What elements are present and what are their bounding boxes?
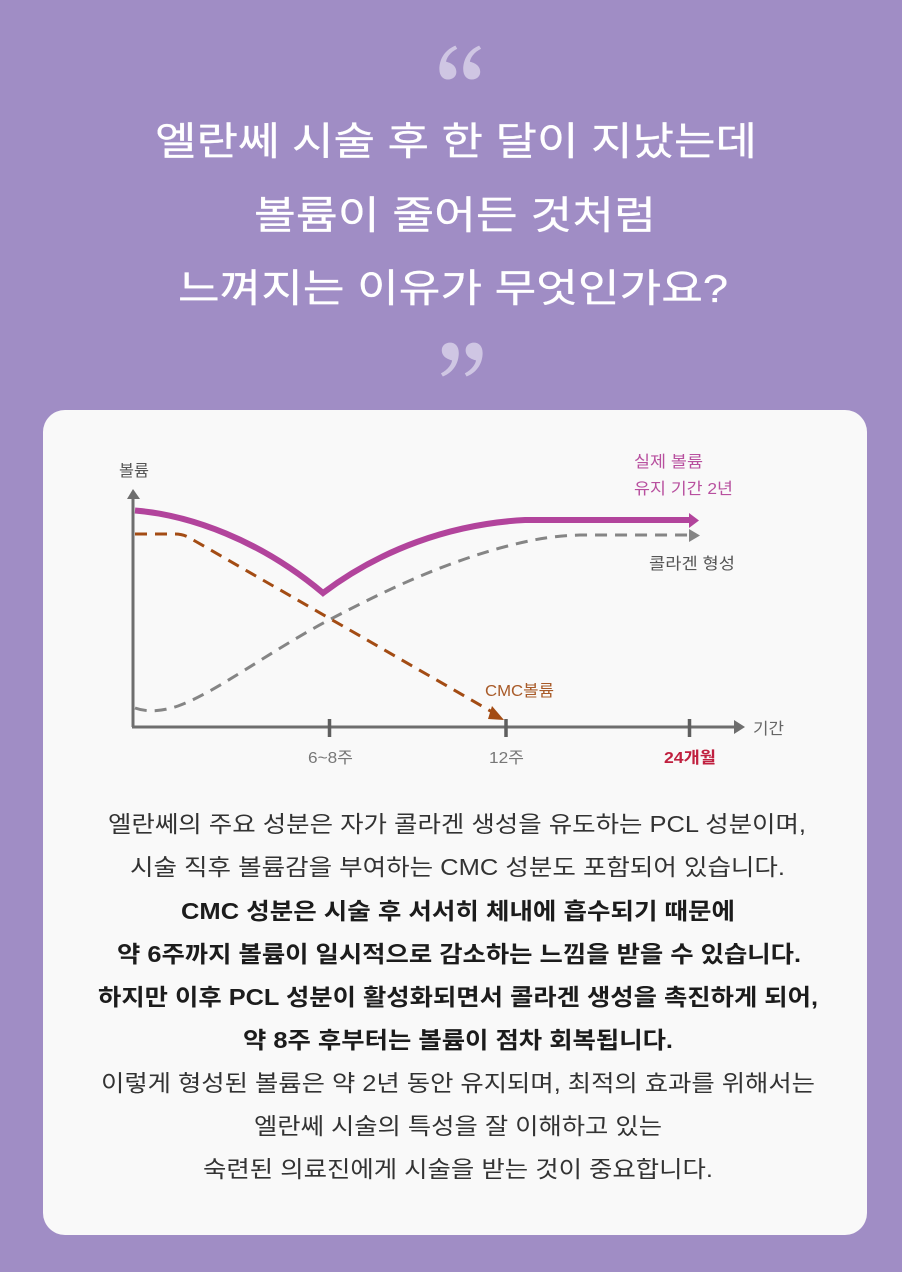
y axis label: 볼륨 (119, 462, 149, 480)
text block: explanation: 숙련된 의료진에게 시술을 받는 것이 중요합니다. (203, 1156, 713, 1182)
curve: collagen formation (135, 529, 700, 711)
curve: CMC volume (135, 534, 504, 720)
icon: opening quotation mark: “ (383, 17, 489, 169)
tick label: 24 months: 24개월 (664, 749, 716, 767)
tick label: 6~8 weeks: 6~8주 (308, 750, 353, 767)
curve: actual volume (135, 510, 699, 593)
text block: explanation: 하지만 이후 PCL 성분이 활성화되면서 콜라겐 생성을 촉진하게 되어, (98, 984, 818, 1010)
title: question heading: 볼륨이 줄어든 것처럼 (254, 195, 656, 238)
icon: closing quotation mark: ” (433, 314, 539, 466)
title: question heading: 느껴지는 이유가 무엇인가요? (178, 268, 728, 311)
text block: explanation: 시술 직후 볼륨감을 부여하는 CMC 성분도 포함되어 있습니다. (130, 854, 785, 880)
text block: explanation: 엘란쎄의 주요 성분은 자가 콜라겐 생성을 유도하는 PCL 성분이며, (108, 811, 806, 837)
tick label: 12 weeks: 12주 (489, 750, 524, 767)
title: question heading (155, 121, 757, 311)
text block: explanation: 엘란쎄 시술의 특성을 잘 이해하고 있는 (254, 1113, 662, 1139)
title: question heading: 엘란쎄 시술 후 한 달이 지났는데 (155, 121, 757, 164)
panel: white explanation card (43, 410, 867, 1235)
text block: explanation: 약 6주까지 볼륨이 일시적으로 감소하는 느낌을 받을 수 있습니다. (117, 941, 801, 967)
text block: explanation: 이렇게 형성된 볼륨은 약 2년 동안 유지되며, 최적의 효과를 위해서는 (101, 1070, 815, 1096)
series label: actual volume (634, 453, 733, 498)
series label: CMC volume: CMC볼륨 (485, 682, 554, 700)
x axis label: 기간 (753, 720, 784, 738)
text block: explanation: 약 8주 후부터는 볼륨이 점차 회복됩니다. (243, 1027, 673, 1053)
series label: actual volume: 유지 기간 2년 (634, 480, 733, 498)
text block: explanation: CMC 성분은 시술 후 서서히 체내에 흡수되기 때문에 (181, 898, 735, 924)
text block: explanation (98, 811, 818, 1182)
series label: actual volume: 실제 볼륨 (634, 453, 703, 471)
chart: volume change over time (119, 453, 784, 767)
series label: collagen formation: 콜라겐 형성 (649, 555, 735, 573)
chart axes (127, 489, 745, 737)
